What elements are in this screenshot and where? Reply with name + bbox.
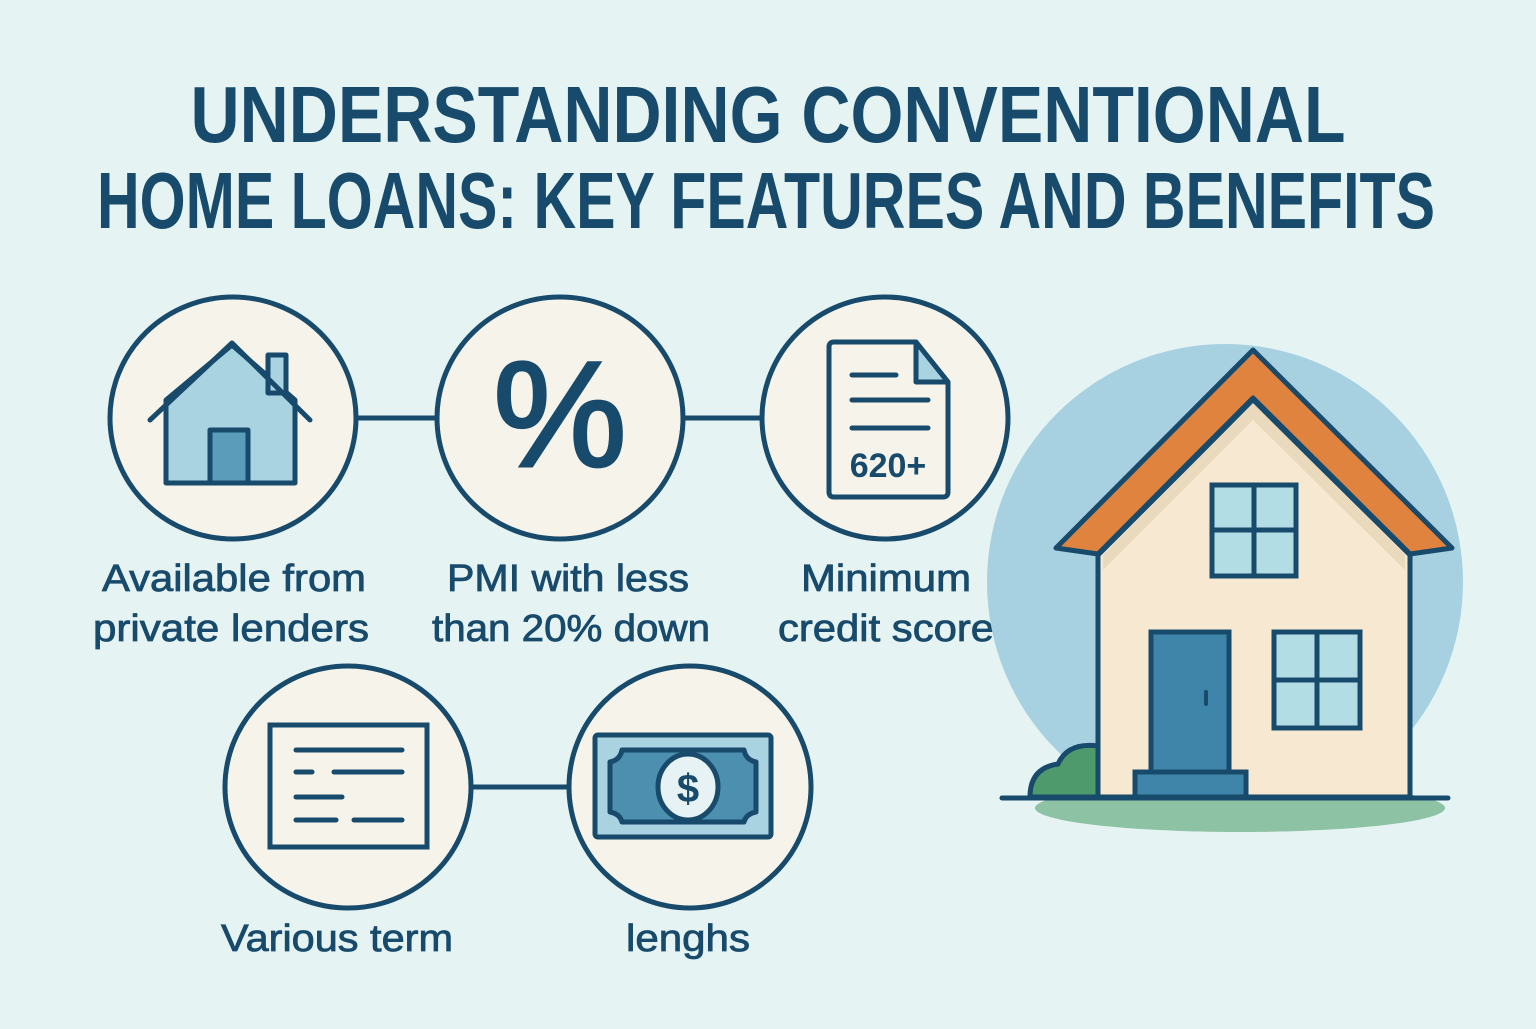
label: private lenders: private lenders bbox=[93, 608, 369, 650]
feature: lengths: $ bbox=[677, 767, 699, 811]
feature: private lenders bbox=[110, 297, 356, 539]
title bbox=[97, 70, 1435, 245]
title: UNDERSTANDING CONVENTIONAL bbox=[190, 70, 1346, 159]
walls bbox=[1098, 400, 1410, 797]
label: credit score: credit score bbox=[778, 608, 994, 650]
label: private lenders bbox=[93, 558, 369, 650]
icon: money bbox=[595, 735, 771, 837]
label: credit score bbox=[778, 558, 994, 650]
label: PMI: PMI with less bbox=[447, 558, 689, 600]
feature: credit score: 620+ bbox=[850, 447, 926, 485]
feature: PMI bbox=[437, 297, 683, 539]
label: credit score: Minimum bbox=[801, 558, 971, 600]
icon: percent: % bbox=[493, 330, 627, 498]
feature: lengths bbox=[569, 666, 811, 908]
icon: house bbox=[150, 343, 310, 483]
roof bbox=[1056, 350, 1452, 554]
label: PMI: than 20% down bbox=[432, 608, 710, 650]
label: various term: Various term bbox=[221, 918, 453, 960]
connectors bbox=[356, 418, 762, 787]
feature: credit score bbox=[762, 297, 1008, 539]
windows bbox=[1135, 485, 1360, 797]
icon: document 620+ bbox=[829, 342, 948, 497]
label: private lenders: Available from bbox=[102, 558, 366, 600]
label: PMI bbox=[432, 558, 710, 650]
icon: form bbox=[270, 725, 427, 847]
illustration: house bbox=[987, 344, 1463, 832]
feature: various term bbox=[225, 666, 471, 908]
label: lengths: lenghs bbox=[626, 918, 750, 960]
bush bbox=[1030, 745, 1098, 797]
